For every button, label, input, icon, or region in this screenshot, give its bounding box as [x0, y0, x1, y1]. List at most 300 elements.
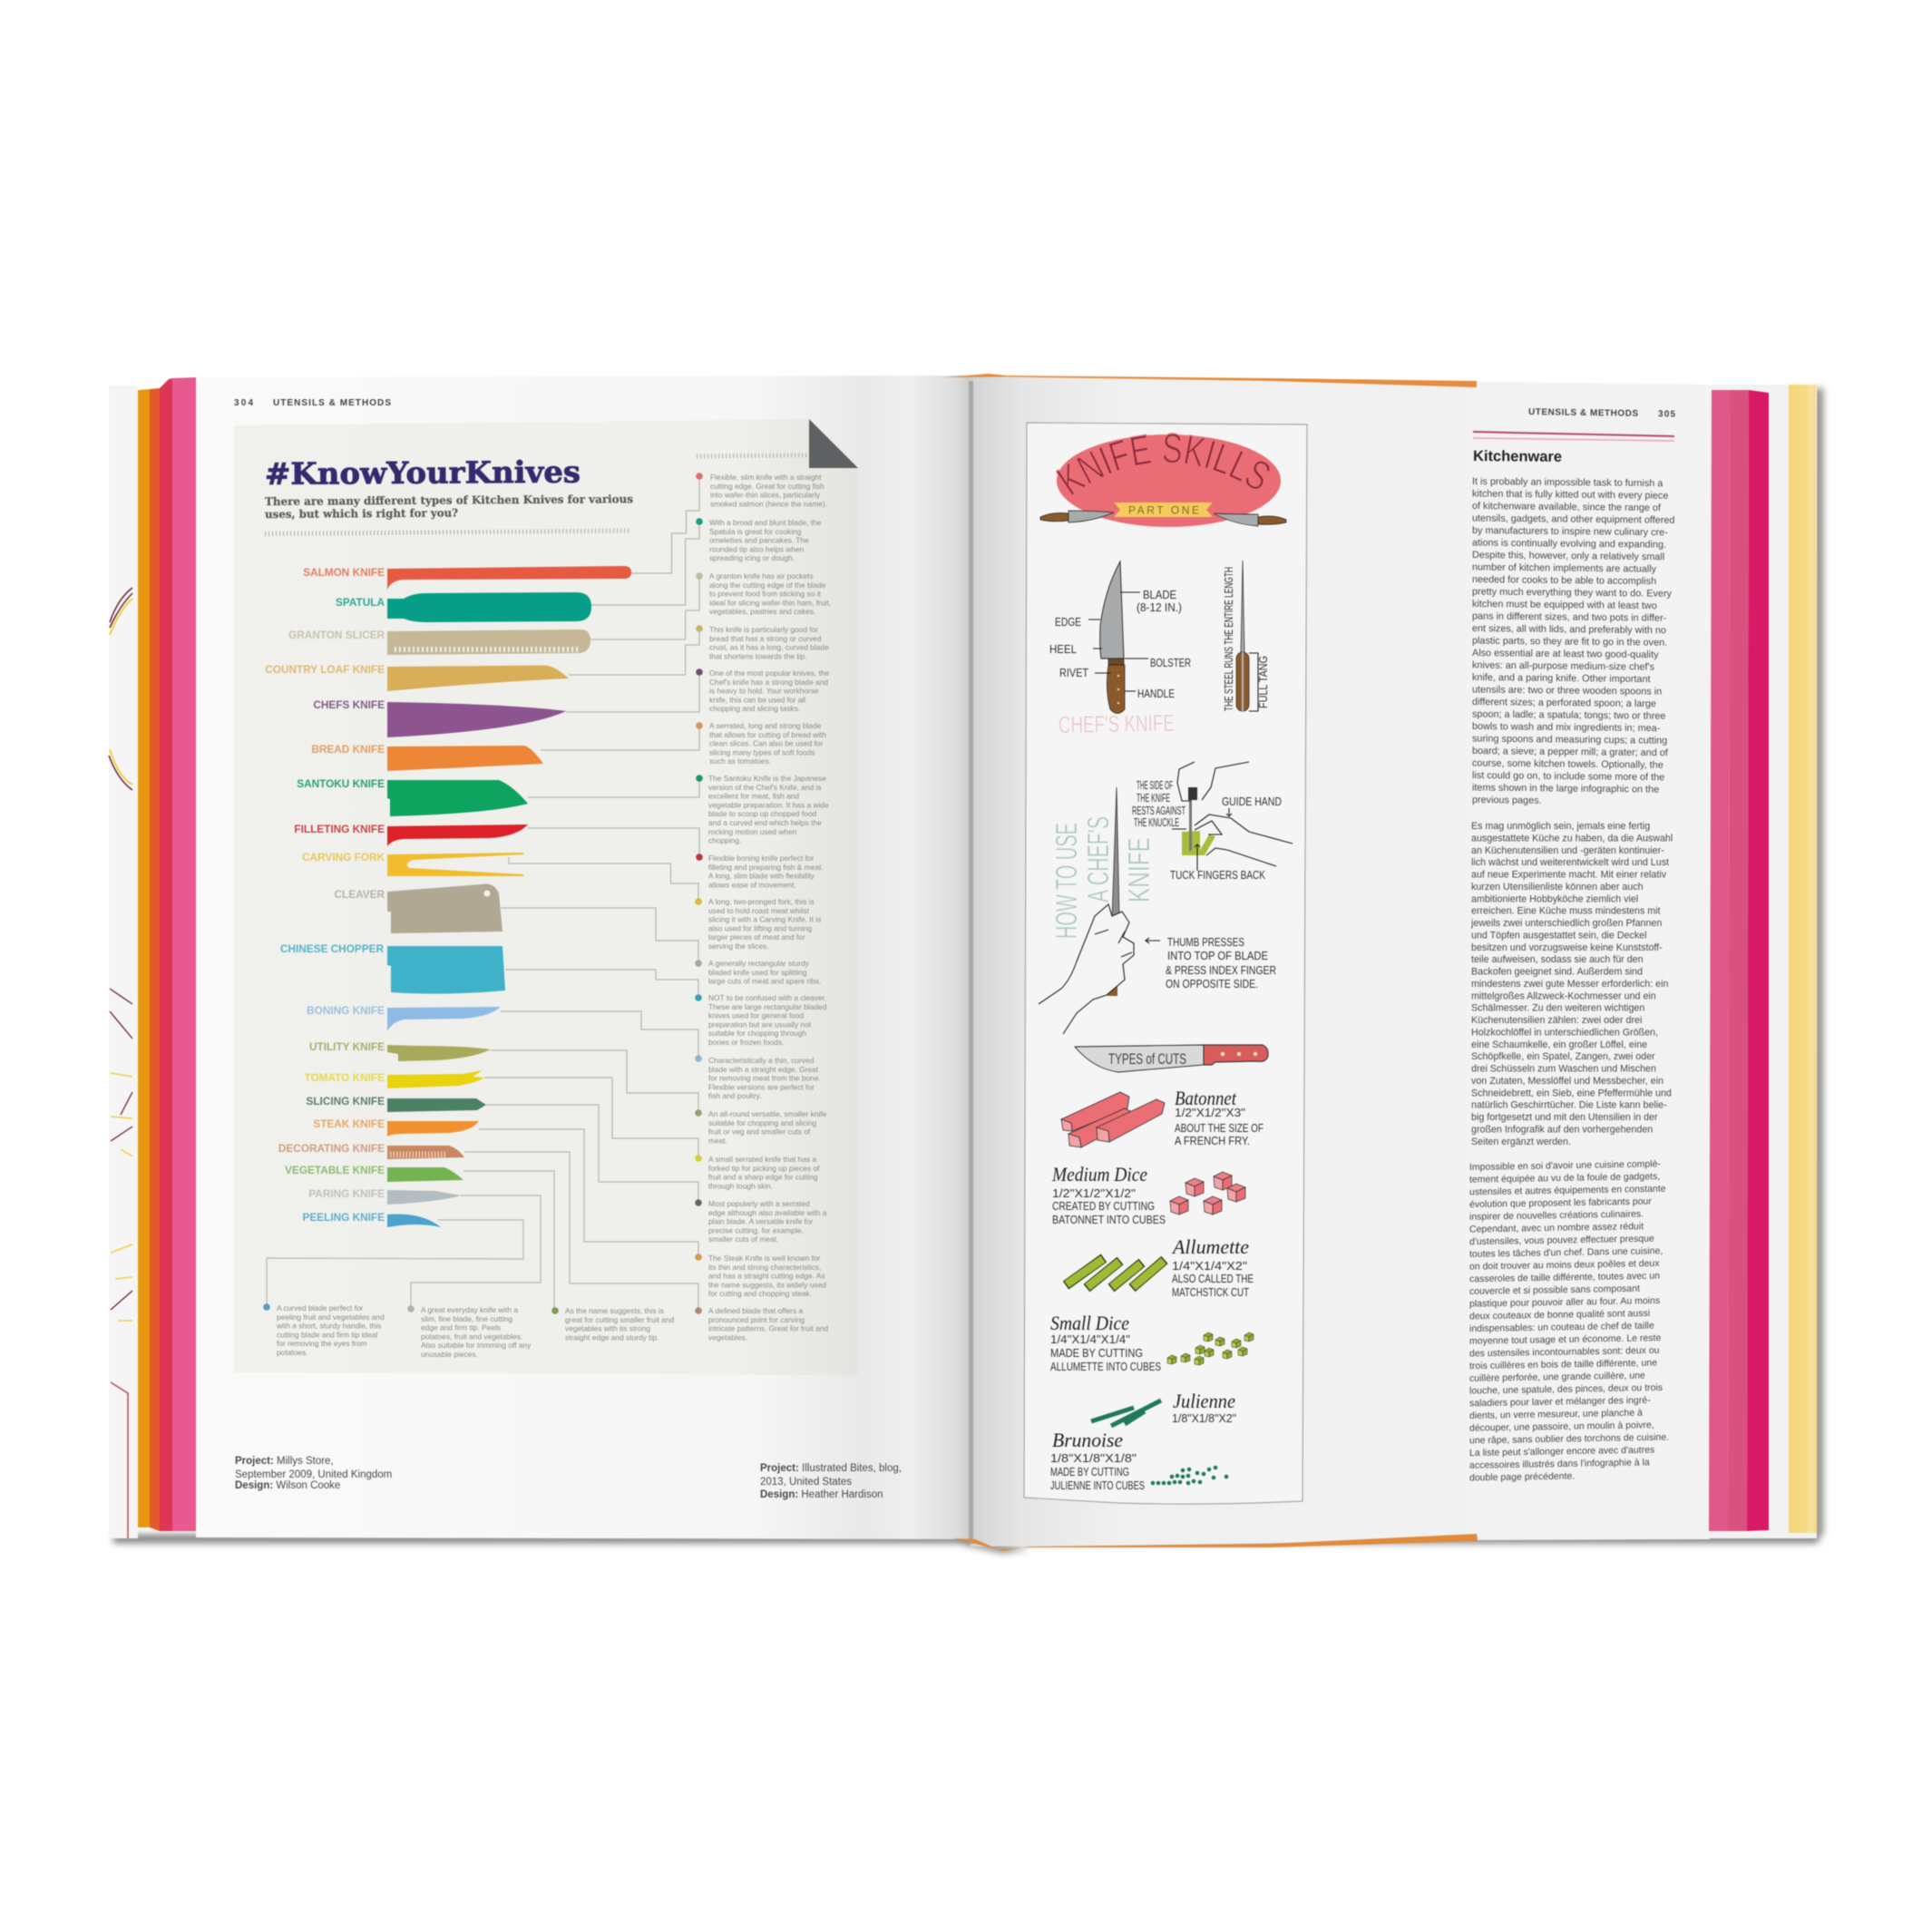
- knife: slicing: [306, 1095, 486, 1112]
- full tang diagram: FULL TANG: [1256, 656, 1270, 708]
- knife descriptions: A generally rectangular sturdy: [708, 959, 810, 968]
- english body text: knife, and a paring knife. Other important: [1472, 672, 1651, 685]
- german body text: Backofen geeignet sind. Außerdem sind: [1471, 967, 1643, 978]
- knife descriptions: A curved blade perfect for: [277, 1303, 364, 1312]
- left running header: UTENSILS & METHODS: [273, 398, 391, 408]
- knife: tomato: TOMATO KNIFE: [305, 1071, 385, 1084]
- leader lines: [267, 476, 699, 1311]
- german body text: auf neue Experimente macht. Mit einer relativ: [1471, 870, 1667, 881]
- german body text: mittelgroßes Allzweck-Kochmesser und ein: [1471, 990, 1656, 1001]
- knife: santoku: [297, 777, 528, 816]
- knife descriptions: omelettes and pancakes. The: [709, 536, 809, 545]
- german body text: und Töpfen ausgestattet sein, die Deckel: [1471, 930, 1647, 941]
- knife descriptions: fish and poultry.: [708, 1091, 762, 1100]
- knife descriptions: preparation but are usually not: [708, 1020, 812, 1029]
- french body text: évolution que proposent les fabricants pour: [1469, 1196, 1652, 1210]
- french body text: deux couteaux de bonne qualité sont aussi: [1469, 1308, 1650, 1322]
- medium dice: 1/2"X1/2"X1/2": [1052, 1186, 1136, 1200]
- allumette: [1066, 1235, 1254, 1299]
- knuckle guide illustration: RESTS AGAINST: [1132, 804, 1186, 817]
- chef's knife diagram: (8-12 IN.): [1137, 600, 1182, 614]
- knife descriptions: One of the most popular knives, the: [709, 668, 830, 678]
- knife descriptions: with a short, sturdy handle, this: [276, 1322, 381, 1331]
- knife: country loaf: [265, 663, 569, 691]
- german body text: jeweils zwei unterschiedlich großen Pfannen: [1470, 918, 1662, 929]
- thumb instruction: & PRESS INDEX FINGER: [1166, 963, 1276, 977]
- brunoise: [1050, 1429, 1228, 1492]
- knife: slicing: SLICING KNIFE: [306, 1095, 385, 1107]
- german body text: lich wächst und weiterentwickelt wird und Lust: [1471, 857, 1669, 868]
- gutter: [969, 381, 973, 1544]
- knife descriptions: great for cutting smaller fruit and: [565, 1315, 674, 1324]
- french body text: La liste peut s'allonger encore avec d'autres: [1469, 1445, 1654, 1459]
- knife descriptions: slicing it with a Carving Knife. It is: [708, 915, 821, 924]
- french body text: des ustensiles incontournables sont: deux ou: [1469, 1345, 1660, 1359]
- knife descriptions: knife, this can be used for all: [709, 695, 805, 704]
- english body text: previous pages.: [1472, 795, 1542, 806]
- knife descriptions: bones or frozen foods.: [708, 1038, 784, 1047]
- chef's knife diagram: HANDLE: [1137, 687, 1175, 700]
- english body text: It is probably an impossible task to furnish a: [1472, 476, 1664, 489]
- knife descriptions: blade with a straight edge. Great: [708, 1065, 819, 1074]
- medium dice: CREATED BY CUTTING: [1052, 1199, 1155, 1213]
- english body text: utensils, gadgets, and other equipment offered: [1472, 513, 1674, 526]
- german body text: eine Schaumkelle, ein großer Löffel, eine: [1471, 1039, 1647, 1050]
- french body text: cuillère perforée, une grande cuillère, une: [1469, 1371, 1645, 1384]
- french body text: une râpe, sans oublier des torchons de cuisine.: [1469, 1432, 1669, 1446]
- german body text: Schöpfkelle, ein Spatel, Zangen, zwei oder: [1471, 1051, 1655, 1062]
- knife descriptions: A small serrated knife that has a: [708, 1155, 817, 1164]
- chef's knife diagram: HEEL: [1049, 642, 1077, 656]
- french body text: découper, une passoire, un moulin à poivre,: [1469, 1420, 1654, 1434]
- section rule: [1473, 432, 1674, 441]
- knife: salmon: [303, 566, 631, 590]
- banner ellipse title: KNIFE SKILLS: [1055, 432, 1270, 495]
- credit: Millys Store: Millys Store,: [274, 1456, 334, 1467]
- credit: Illustrated Bites: Heather Hardison: [798, 1489, 883, 1500]
- english body text: Despite this, however, only a relatively small: [1472, 550, 1664, 562]
- right colour stripes: [1709, 385, 1817, 1533]
- left colour stripes: [138, 377, 196, 1531]
- french body text: tement équipée au vu de la foule de gadgets,: [1469, 1171, 1660, 1186]
- english body text: knives: an all-purpose medium-size chef's: [1472, 660, 1655, 673]
- knife descriptions: suitable for chopping and slicing: [708, 1118, 817, 1127]
- knife: utility: UTILITY KNIFE: [309, 1040, 385, 1053]
- heading: kitchenware: Kitchenware: [1473, 448, 1562, 465]
- knife: utility: [309, 1040, 491, 1061]
- right running header: 305: [1658, 409, 1676, 420]
- english body text: plastic parts, so they are fit to go in the oven.: [1472, 636, 1667, 649]
- knife descriptions: Chef's knife has a strong blade and: [709, 678, 828, 687]
- thumb instruction: THUMB PRESSES: [1167, 935, 1244, 949]
- allumette: 1/4"X1/4"X2": [1172, 1259, 1247, 1273]
- top orange book edge: [943, 374, 1477, 387]
- chef's knife diagram: [1049, 561, 1191, 738]
- knife: granton: GRANTON SLICER: [288, 629, 385, 641]
- knife: vegetable: VEGETABLE KNIFE: [285, 1164, 385, 1176]
- german body text: Küchenutensilien zählen: zwei oder drei: [1471, 1015, 1642, 1026]
- chef's knife diagram: EDGE: [1055, 615, 1081, 629]
- full tang diagram: [1222, 561, 1270, 711]
- knife descriptions: and has a straight cutting edge. As: [708, 1272, 825, 1281]
- german body text: natürlich Geschirrtücher. Die Liste kann belie-: [1471, 1100, 1667, 1111]
- knife descriptions: through tough skin.: [708, 1181, 773, 1190]
- english body text: ent sizes, all with lids, and preferably with no: [1472, 623, 1666, 636]
- hand holding knife: [1039, 787, 1134, 1034]
- knife descriptions: to prevent food from sticking so it: [709, 590, 822, 599]
- thumb instruction: INTO TOP OF BLADE: [1167, 949, 1268, 962]
- knife: vegetable: [285, 1164, 463, 1182]
- poster background: [234, 419, 858, 1375]
- english body text: by manufacturers to inspire new culinary cre-: [1472, 525, 1668, 538]
- german body text: ausgestattete Küche zu haben, da die Auswahl: [1471, 833, 1673, 844]
- english body text: pans in different sizes, and two pots in differ-: [1472, 611, 1667, 624]
- credit: Illustrated Bites: Project:: [760, 1463, 799, 1474]
- chef's knife diagram: BLADE: [1143, 588, 1176, 601]
- right white page edge: [1710, 385, 1817, 1538]
- french body text: toutes les tâches d'un chef. Dans une cuisine,: [1469, 1245, 1663, 1260]
- french body text: louche, une spatule, des pinces, deux ou trois: [1469, 1382, 1663, 1397]
- german body text: mindestens zwei gute Messer erforderlich: ein: [1471, 979, 1668, 990]
- knife descriptions: that allows for cutting of bread with: [709, 730, 826, 739]
- english body text: list could go on, to include some more of the: [1472, 770, 1664, 783]
- book shadow: [113, 388, 1823, 1553]
- english body text: pretty much everything they want to do. Every: [1472, 587, 1673, 600]
- knife: peeling: PEELING KNIFE: [303, 1211, 385, 1224]
- knife descriptions: peeling fruit and vegetables and: [277, 1312, 385, 1322]
- knife: bread: BREAD KNIFE: [311, 743, 385, 756]
- subtitle: [265, 493, 633, 521]
- knife descriptions: larger pieces of meat and for: [708, 932, 805, 942]
- knife descriptions: slicing many types of soft foods: [709, 747, 815, 756]
- knife descriptions: slim, fine blade, fine cutting: [421, 1314, 512, 1323]
- knife: filleting: [294, 823, 528, 846]
- small dice: MADE BY CUTTING: [1050, 1346, 1143, 1360]
- knife descriptions: cutting blade and firm tip ideal: [277, 1330, 377, 1339]
- medium dice: Medium Dice: [1051, 1163, 1147, 1186]
- chef's knife diagram: RIVET: [1059, 666, 1088, 679]
- right running header: UTENSILS & METHODS: [1528, 407, 1638, 419]
- knuckle guide illustration: THE SIDE OF: [1137, 778, 1173, 792]
- knife descriptions: cutting edge. Great for cutting fish: [710, 482, 825, 491]
- knife: chinese chopper: [280, 942, 505, 994]
- knuckle guide illustration: THE KNUCKLE: [1134, 815, 1179, 829]
- knuckle guide illustration: THE KNIFE: [1137, 791, 1170, 805]
- english body text: board; a sieve; a pepper mill; a grater; and of: [1472, 746, 1669, 758]
- credit: Millys Store: September 2009, United Kingdom: [235, 1469, 392, 1480]
- knife descriptions: As the name suggests, this is: [565, 1306, 664, 1315]
- german body text: Seiten ergänzt werden.: [1471, 1137, 1571, 1147]
- english body text: ations is continually evolving and expanding.: [1472, 538, 1666, 551]
- knife: granton: [288, 629, 590, 655]
- french body text: double page précédente.: [1469, 1470, 1575, 1483]
- german body text: Holzkochlöffel in unterschiedlichen Größen,: [1471, 1027, 1658, 1038]
- knife descriptions: rounded tip also helps when: [709, 544, 805, 553]
- knife descriptions: potatoes, fruit and vegetables.: [421, 1332, 522, 1341]
- german body text: kurzen Utensilienliste können aber auch: [1471, 882, 1644, 893]
- knife descriptions: chopping and slicing tasks.: [709, 704, 800, 713]
- knife: country loaf: COUNTRY LOAF KNIFE: [265, 663, 385, 676]
- knife descriptions: that shortens towards the tip.: [709, 651, 807, 660]
- english body text: spoon; a ladle; a spatula; tongs; two or three: [1472, 709, 1665, 722]
- knife descriptions: intricate patterns. Great for fruit and: [708, 1324, 829, 1333]
- german body text: big fortgesetzt und mit den Utensilien in der: [1471, 1112, 1658, 1123]
- knife descriptions: forked tip for picking up pieces of: [708, 1164, 820, 1173]
- knuckle guide illustration: GUIDE HAND: [1222, 795, 1282, 808]
- types of cuts knife: TYPES of CUTS: [1108, 1050, 1186, 1068]
- knife: decorating: DECORATING KNIFE: [278, 1142, 385, 1155]
- knife: carving fork: [302, 851, 523, 876]
- knife descriptions: pronounced point for carving: [708, 1315, 805, 1324]
- knife descriptions: for removing meat from the bone.: [708, 1074, 821, 1083]
- subtitle: uses, but which is right for you?: [265, 507, 458, 521]
- knife descriptions: A granton knife has air pockets: [709, 571, 814, 581]
- german body text: an Küchenutensilien und -geräten kontinuier-: [1471, 845, 1664, 856]
- german body text: Schneidebrett, ein Sieb, eine Pfeffermühle und: [1471, 1088, 1672, 1098]
- french body text: Impossible en soi d'avoir une cuisine complè-: [1469, 1158, 1661, 1173]
- brunoise: Brunoise: [1052, 1429, 1123, 1451]
- french body text: moyenne tout usage et un économe. Le reste: [1469, 1332, 1661, 1347]
- knife descriptions: With a broad and blunt blade, the: [709, 518, 822, 527]
- french body text: casseroles de taille différente, toutes avec un: [1469, 1271, 1660, 1284]
- knife: steak: [313, 1117, 479, 1137]
- panel: knife skills: [1023, 421, 1308, 1506]
- knife descriptions: vegetable preparation. It has a wide: [708, 800, 829, 809]
- knife descriptions: chopping.: [708, 836, 741, 845]
- french body text: saladiers pour laver et mélanger des ingré-: [1469, 1395, 1651, 1409]
- brunoise: MADE BY CUTTING: [1050, 1465, 1129, 1478]
- knife descriptions: large cuts of meat and spare ribs.: [708, 977, 821, 986]
- batonnet: ABOUT THE SIZE OF: [1175, 1121, 1264, 1135]
- small dice: ALLUMETTE INTO CUBES: [1050, 1360, 1161, 1373]
- knife descriptions: straight edge and sturdy tip.: [565, 1332, 659, 1342]
- batonnet: [1061, 1087, 1264, 1147]
- knife descriptions: A serrated, long and strong blade: [709, 721, 822, 730]
- english body text: of kitchenware available, since the range of: [1472, 501, 1662, 513]
- knife descriptions: suitable for chopping through: [708, 1029, 806, 1038]
- small dice: [1050, 1312, 1254, 1373]
- credit: Illustrated Bites: 2013, United States: [760, 1477, 852, 1488]
- credit: Millys Store: Design:: [235, 1480, 273, 1491]
- medium dice: BATONNET INTO CUBES: [1052, 1213, 1166, 1226]
- knife: paring: [308, 1187, 461, 1205]
- knife descriptions: Flexible, slim knife with a straight: [710, 473, 822, 482]
- knife descriptions: for removing the eyes from: [277, 1339, 367, 1348]
- full tang diagram: THE STEEL RUNS THE ENTIRE LENGTH: [1222, 567, 1235, 711]
- banner ellipse title: PART ONE: [1128, 504, 1199, 517]
- knife descriptions: filleting and preparing fish & meat.: [708, 863, 824, 872]
- credit: Millys Store: Project:: [235, 1456, 274, 1467]
- julienne: [1091, 1390, 1236, 1426]
- knife descriptions: NOT to be confused with a cleaver.: [708, 993, 826, 1002]
- knife: paring: PARING KNIFE: [308, 1187, 385, 1200]
- knife: boning: [307, 1004, 501, 1031]
- german body text: teile aufweisen, sodass sie auch für den: [1471, 954, 1644, 965]
- english body text: suring spoons and measuring cups; a cutting: [1472, 734, 1667, 746]
- english body text: Also essential are at least two good-quality: [1472, 648, 1659, 660]
- allumette: ALSO CALLED THE: [1172, 1272, 1254, 1285]
- knife descriptions: An all-round versatile, smaller knife: [708, 1109, 827, 1118]
- knuckle guide illustration: [1132, 762, 1293, 882]
- julienne: Julienne: [1173, 1390, 1235, 1412]
- banner ellipse title: [1039, 432, 1288, 528]
- knife descriptions: used to hold roast meat whilst: [708, 906, 809, 915]
- knife descriptions: meat.: [708, 1136, 727, 1145]
- french body text: couvercle et si possible sans composant: [1469, 1283, 1640, 1297]
- batonnet: A FRENCH FRY.: [1175, 1134, 1250, 1147]
- knife descriptions: spreading icing or dough.: [709, 553, 795, 562]
- knife descriptions: serving the slices.: [708, 942, 769, 951]
- knife descriptions: fruit or veg and smaller cuts of: [708, 1127, 811, 1137]
- knife: decorating: [278, 1142, 464, 1159]
- knife descriptions: The Steak Knife is well known for: [708, 1254, 821, 1263]
- knife descriptions: unusable pieces.: [421, 1350, 478, 1359]
- knife descriptions: crust, as it has a long, curved blade: [709, 643, 829, 652]
- knife: spatula: SPATULA: [336, 596, 385, 609]
- english body text: different sizes; a perforated spoon; a large: [1472, 697, 1656, 709]
- knife: salmon: SALMON KNIFE: [303, 566, 385, 579]
- how to use a chef's knife heading: A CHEF'S: [1081, 816, 1115, 903]
- knife descriptions: edge although also available with a: [708, 1208, 827, 1217]
- knife descriptions: vegetables with its strong: [565, 1324, 650, 1333]
- knife descriptions: [276, 473, 831, 1359]
- how to use a chef's knife heading: [1049, 816, 1156, 939]
- knife: spatula: [336, 592, 591, 622]
- french body text: trois cuillères en bois de taille différente, une: [1469, 1358, 1657, 1371]
- knife descriptions: for cutting and chopping steak.: [708, 1289, 812, 1298]
- knife descriptions: plain blade. A versatile knife for: [708, 1217, 814, 1226]
- page fold corner: [809, 419, 858, 468]
- knife descriptions: potatoes.: [277, 1348, 307, 1357]
- knife: filleting: FILLETING KNIFE: [294, 823, 385, 835]
- small dice: Small Dice: [1050, 1312, 1129, 1334]
- left page: [196, 376, 972, 1539]
- right page: [971, 376, 1710, 1547]
- how to use a chef's knife heading: HOW TO USE: [1049, 823, 1083, 939]
- knife: carving fork: CARVING FORK: [302, 851, 385, 864]
- knife descriptions: Flexible versions are perfect for: [708, 1082, 815, 1091]
- thumb instruction: ON OPPOSITE SIDE.: [1166, 977, 1258, 990]
- knife descriptions: Also suitable for trimming off any: [421, 1341, 532, 1350]
- german body text: Schälmesser. Zu den weiteren wichtigen: [1471, 1003, 1644, 1014]
- knife descriptions: vegetables, pastries and cakes.: [709, 607, 815, 616]
- knife descriptions: such as tomatoes.: [709, 756, 771, 766]
- english body text: items shown in the large infographic on the: [1472, 783, 1659, 795]
- french body text: indispensables: un couteau de chef de taille: [1469, 1321, 1654, 1334]
- knife descriptions: Most popularly with a serrated: [708, 1199, 810, 1208]
- french body text: inspirer de nouvelles créations culinaires.: [1469, 1208, 1644, 1223]
- description dots: [263, 473, 703, 1314]
- english body text: bowls to wash and mix ingredients in; mea-: [1472, 721, 1661, 734]
- german body text: von Zutaten, Messlöffel und Messbecher, ein: [1471, 1076, 1664, 1087]
- knife: chefs: [313, 698, 566, 737]
- german body text: Es mag unmöglich sein, jemals eine fertig: [1471, 821, 1650, 832]
- german body text: besitzen und vorzugsweise keine Kunststoff-: [1471, 942, 1663, 953]
- knife: peeling: [303, 1211, 441, 1227]
- english body text: kitchen must be equipped with at least two: [1472, 599, 1657, 611]
- knife descriptions: smaller cuts of meat.: [708, 1234, 778, 1244]
- english body text: needed for cooks to be able to accomplish: [1472, 574, 1656, 587]
- knife descriptions: fruit and a sharp edge for cutting: [708, 1173, 818, 1182]
- knife descriptions: excellent for meat, fish and: [708, 792, 799, 801]
- knife: chefs: CHEFS KNIFE: [313, 698, 385, 711]
- knife descriptions: A great everyday knife with a: [421, 1305, 518, 1314]
- left cover edge: [109, 385, 138, 1538]
- knife: boning: BONING KNIFE: [307, 1004, 385, 1017]
- knife descriptions: Flexible boning knife perfect for: [708, 854, 815, 863]
- english body text: course, some kitchen towels. Optionally, the: [1472, 758, 1664, 771]
- poster: know your knives: [234, 419, 858, 1375]
- knife descriptions: These are large rectangular bladed: [708, 1002, 827, 1011]
- credit: Illustrated Bites: Illustrated Bites, blog,: [799, 1463, 902, 1474]
- english body text: utensils are: two or three wooden spoons in: [1472, 685, 1662, 698]
- knife descriptions: version of the Chef's Knife, and is: [708, 783, 822, 792]
- small dice: 1/4"X1/4"X1/4": [1050, 1332, 1130, 1346]
- knife descriptions: bread that has a strong or curved: [709, 634, 822, 643]
- german body text: ambitionierte Hobbyköche ziemlich viel: [1471, 893, 1638, 904]
- allumette: Allumette: [1171, 1235, 1249, 1258]
- batonnet: Batonnet: [1175, 1087, 1237, 1109]
- french body text: dients, un verre mesureur, une planche à: [1469, 1408, 1643, 1421]
- knife descriptions: into wafer-thin slices, particularly: [710, 491, 821, 500]
- medium dice: [1051, 1163, 1245, 1226]
- batonnet: 1/2"X1/2"X3": [1175, 1106, 1245, 1119]
- knife descriptions: precise cutting, for example,: [708, 1225, 804, 1234]
- thumb instruction: [1146, 935, 1276, 990]
- knife descriptions: bladed knife used for splitting: [708, 968, 807, 977]
- knife descriptions: This knife is particularly good for: [709, 625, 818, 634]
- knife descriptions: is heavy to hold. Your workhorse: [709, 687, 819, 696]
- how to use a chef's knife heading: KNIFE: [1122, 837, 1156, 903]
- german body text: erreichen. Eine Küche muss mindestens mit: [1471, 906, 1661, 917]
- knife descriptions: allows ease of movement.: [708, 880, 796, 889]
- knife descriptions: A long, slim blade with flexibility: [708, 872, 815, 881]
- knuckle guide illustration: TUCK FINGERS BACK: [1170, 868, 1265, 882]
- french body text: on doit trouver au moins deux poêles et deux: [1469, 1258, 1660, 1273]
- french body text: accessoires illustrés dans l'infographie à la: [1469, 1457, 1650, 1471]
- knife descriptions: along the cutting edge of the blade: [709, 581, 826, 590]
- knife descriptions: also used for lifting and turning: [708, 923, 812, 932]
- credit: Millys Store: Wilson Cooke: [273, 1480, 340, 1491]
- chef's knife diagram: CHEF'S KNIFE: [1059, 709, 1175, 738]
- french body text: plastique pour pouvoir aller au four. Au moins: [1469, 1295, 1660, 1310]
- panel frame: [1024, 423, 1307, 1504]
- knife descriptions: A long, two-pronged fork, this is: [708, 897, 815, 906]
- knife: cleaver: CLEAVER: [334, 888, 385, 901]
- chef's knife diagram: BOLSTER: [1150, 656, 1191, 669]
- knife descriptions: its thin and strong characteristics,: [708, 1263, 821, 1272]
- hatched rules: [265, 455, 807, 533]
- knife descriptions: ideal for slicing wafer-thin ham, fruit,: [709, 598, 831, 607]
- knife descriptions: rocking motion used when: [708, 827, 797, 836]
- knife descriptions: A defined blade that offers a: [708, 1306, 803, 1315]
- types of cuts knife: [1075, 1045, 1268, 1072]
- knife descriptions: Characteristically a thin, curved: [708, 1056, 815, 1065]
- brunoise: JULIENNE INTO CUBES: [1050, 1478, 1145, 1492]
- knife descriptions: and a curved end which helps the: [708, 818, 822, 827]
- knife descriptions: the name suggests, its widely used: [708, 1280, 826, 1289]
- knife descriptions: knives used for general food: [708, 1011, 805, 1020]
- english body text: number of kitchen implements are actually: [1472, 562, 1657, 575]
- german body text: drei Schüsseln zum Waschen und Mischen: [1471, 1064, 1656, 1075]
- allumette: MATCHSTICK CUT: [1172, 1285, 1249, 1299]
- knife descriptions: The Santoku Knife is the Japanese: [708, 774, 826, 783]
- knife descriptions: edge and firm tip. Peels: [421, 1323, 501, 1332]
- french body text: Cependant, avec un nombre assez réduit: [1469, 1221, 1644, 1234]
- knife descriptions: blade to scoop up chopped food: [708, 809, 817, 818]
- german body text: großen Infografik auf den vorhergehenden: [1471, 1125, 1653, 1136]
- knife: santoku: SANTOKU KNIFE: [297, 777, 385, 790]
